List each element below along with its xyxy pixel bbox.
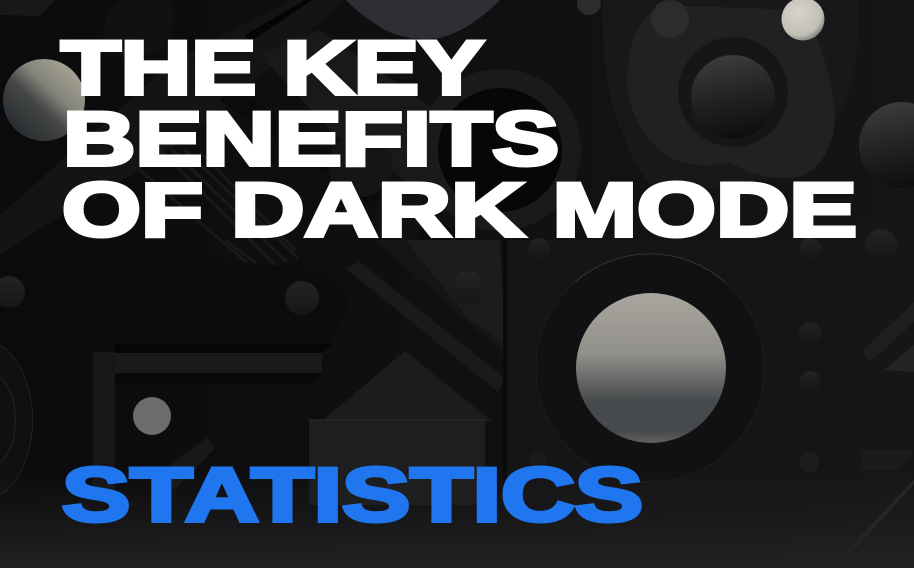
small light sphere top right — [782, 0, 824, 40]
lower right square plate — [503, 240, 857, 502]
title: THE KEY — [61, 26, 484, 111]
disc around large sphere — [536, 254, 764, 482]
top centre rounded plate — [346, 0, 500, 39]
dark sphere top right — [691, 55, 775, 139]
light sphere top left — [3, 59, 85, 141]
title: OF DARK MODE — [62, 168, 857, 253]
title — [61, 26, 857, 253]
statistics label: STATISTICS — [62, 453, 643, 538]
upper right outer blob — [603, 0, 858, 190]
bottom fade — [0, 470, 914, 568]
large dark semi shape — [78, 240, 350, 345]
large light sphere — [576, 293, 726, 443]
frame — [93, 352, 115, 490]
upper right inner blob — [627, 5, 835, 178]
top left shapes — [0, 0, 55, 16]
arch ring — [419, 69, 581, 231]
right edge panel — [857, 216, 914, 500]
diagonal bars — [345, 262, 505, 392]
house — [322, 351, 492, 421]
stripes — [140, 150, 298, 270]
left rings — [0, 345, 33, 495]
title: BENEFITS — [63, 97, 559, 182]
grey sphere lower left — [133, 397, 171, 435]
dark sphere right edge — [859, 102, 914, 188]
